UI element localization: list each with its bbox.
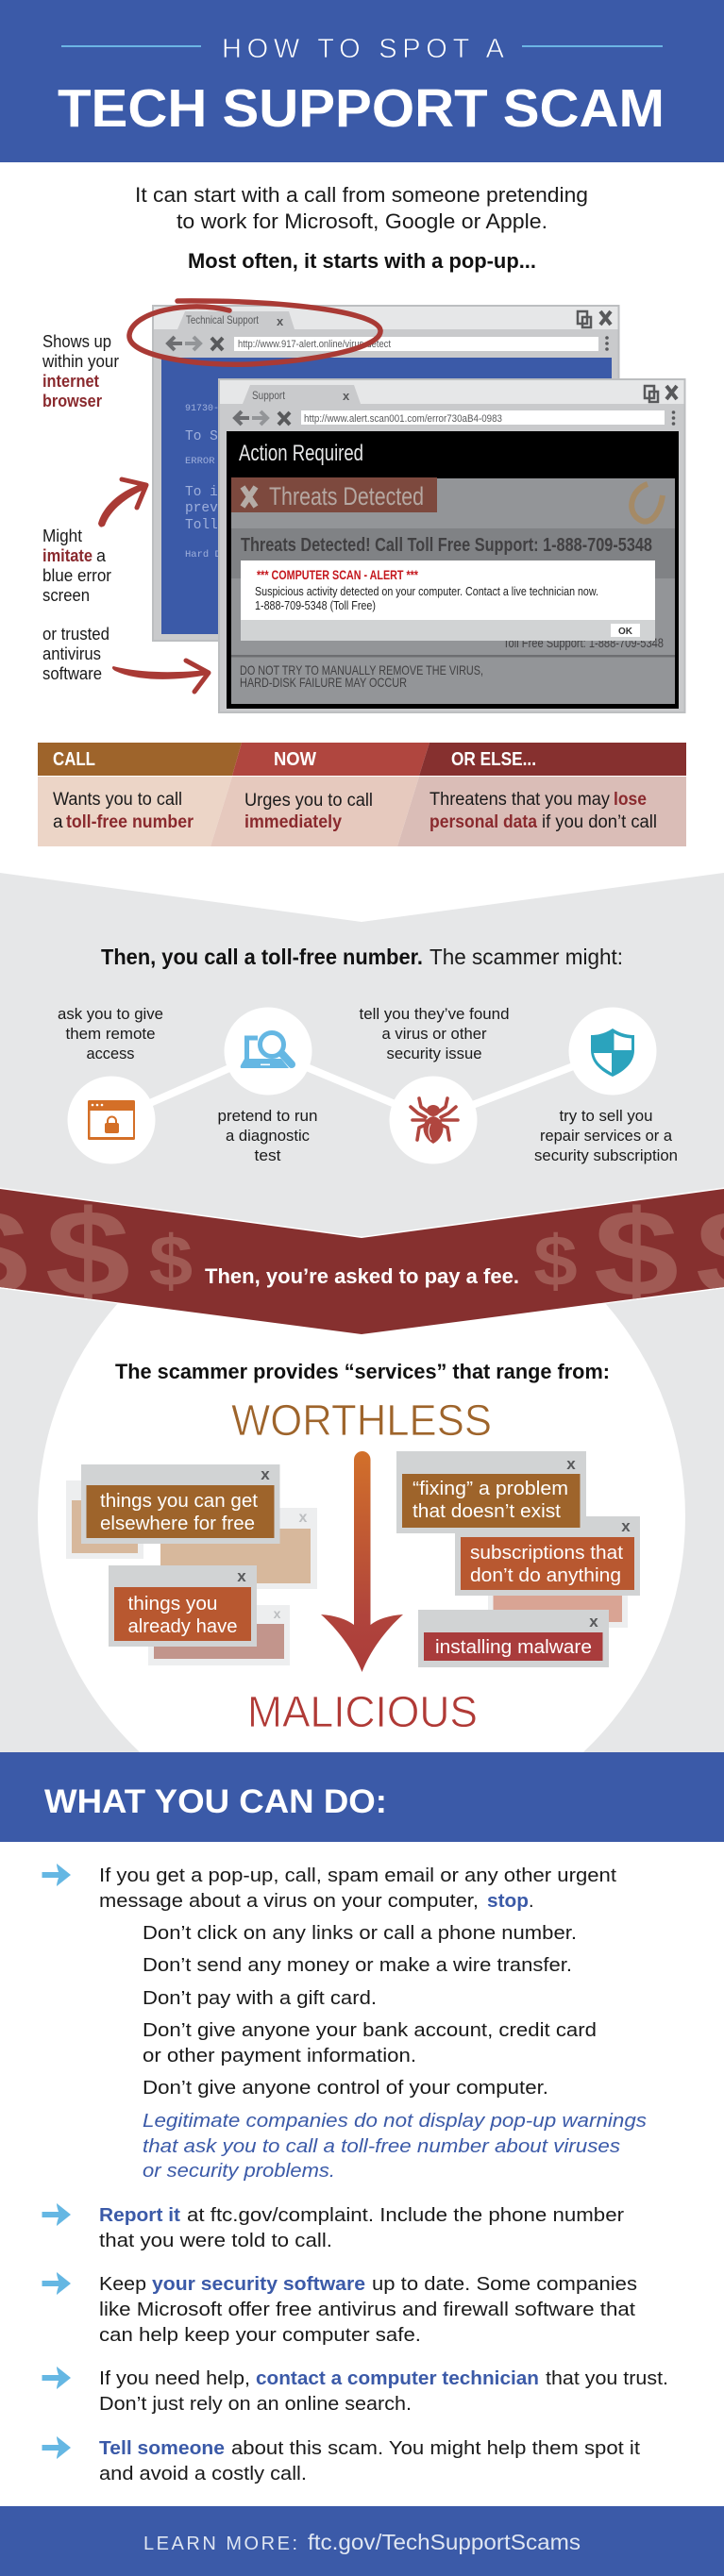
- back browser window: blue error screen: x: [277, 314, 284, 328]
- title kicker: HOW TO SPOT A: [222, 34, 505, 64]
- annotation: shows up in browser: browser: [42, 392, 102, 410]
- tip: contact a technician: contact a computer technician: [256, 2368, 539, 2389]
- front browser window: fake antivirus alert: Suspicious activity detected on your computer. Contact a live technician now.: [255, 585, 598, 598]
- annotation: shows up in browser: within your: [42, 352, 119, 371]
- annotation: trusted antivirus software: or trusted: [42, 625, 109, 644]
- italic note: Legitimate companies do not display pop-up warnings: [143, 2111, 647, 2132]
- front browser window: fake antivirus alert: Action Required: [239, 441, 363, 466]
- red chevron banner with dollar signs: $: [149, 1221, 193, 1301]
- arrow: to antivirus popup: [112, 661, 209, 692]
- tip: tell someone: Tell someone: [99, 2438, 225, 2459]
- grey section background: [0, 873, 724, 1752]
- sub-list of don'ts: Don’t give anyone your bank account, credit card: [143, 2020, 597, 2041]
- annotation: trusted antivirus software: [42, 625, 109, 683]
- annotation: imitate blue error screen: Might: [42, 527, 82, 545]
- italic note: or security problems.: [143, 2161, 335, 2182]
- popup: fixing a problem that doesn't exist: “fixing” a problem: [413, 1479, 568, 1499]
- tip: security software: like Microsoft offer free antivirus and firewall software that: [99, 2300, 635, 2320]
- column headings: CALL: [53, 749, 95, 770]
- label: diagnostic test: [217, 1107, 317, 1164]
- column text: [53, 790, 657, 832]
- column text: Wants you to call: [53, 790, 182, 810]
- tip: report it: Report it: [99, 2205, 180, 2226]
- front browser window: fake antivirus alert: [218, 378, 685, 713]
- icon: laptop with magnifier: [225, 1008, 311, 1095]
- footer banner: ftc.gov/TechSupportScams: [308, 2530, 581, 2554]
- tip: report it: [99, 2205, 624, 2251]
- label: sell repair services: try to sell you: [559, 1107, 653, 1125]
- label: remote access: access: [87, 1045, 134, 1062]
- label: found a virus: tell you they’ve found: [359, 1005, 510, 1023]
- column text: if you don’t call: [542, 812, 657, 832]
- annotation: trusted antivirus software: software: [42, 664, 102, 683]
- italic note: that ask you to call a toll-free number about viruses: [143, 2136, 620, 2157]
- arrow bullet 3: [42, 2272, 71, 2295]
- label: diagnostic test: a diagnostic: [226, 1127, 310, 1145]
- popup: installing malware: [418, 1610, 609, 1667]
- column text: immediately: [244, 812, 342, 832]
- tip: tell someone: about this scam. You might help them spot it: [231, 2438, 640, 2459]
- popup: installing malware: x: [589, 1613, 598, 1631]
- tip: report it: at ftc.gov/complaint. Include the phone number: [187, 2205, 624, 2226]
- gradient arrow worthless to malicious: [321, 1451, 403, 1672]
- column headings: OR ELSE...: [451, 749, 536, 770]
- annotation: shows up in browser: [42, 332, 119, 410]
- popup: subscriptions that don't do anything: x: [621, 1517, 631, 1535]
- header banner: [0, 0, 724, 162]
- popup: things you can get elsewhere for free: [81, 1464, 279, 1544]
- arrow bullet 2: [42, 2203, 71, 2226]
- tip: stop: .: [529, 1891, 534, 1912]
- popup: things you already have: things you: [128, 1594, 217, 1614]
- icon: spider bug: [389, 1076, 478, 1164]
- annotation: shows up in browser: Shows up: [42, 332, 111, 351]
- label: diagnostic test: pretend to run: [217, 1107, 317, 1125]
- intro text: Most often, it starts with a pop-up...: [188, 249, 536, 273]
- back browser window: blue error screen: 91730-: [185, 404, 219, 414]
- italic note: [143, 2111, 647, 2182]
- back browser window: blue error screen: To i: [185, 485, 218, 500]
- what you can do banner: WHAT YOU CAN DO:: [44, 1783, 387, 1820]
- popup: fixing a problem that doesn't exist: [396, 1451, 586, 1533]
- tip: stop: If you get a pop-up, call, spam email or any other urgent: [99, 1865, 616, 1886]
- heading: then you call: Then, you call a toll-free number.: [101, 945, 423, 969]
- front browser window: fake antivirus alert: HARD-DISK FAILURE MAY OCCUR: [240, 675, 407, 690]
- tip: contact a technician: Don’t just rely on an online search.: [99, 2394, 412, 2415]
- popup: things you can get elsewhere for free: x: [261, 1465, 270, 1483]
- tip: security software: your security software: [152, 2274, 365, 2295]
- arrow: to blue error screen: [98, 479, 146, 527]
- back browser window: blue error screen: To S: [185, 429, 218, 444]
- back browser window: blue error screen: Hard D: [185, 549, 221, 560]
- label: found a virus: security issue: [387, 1045, 481, 1062]
- what you can do banner: [0, 1752, 724, 1842]
- back browser window: blue error screen: Technical Support: [186, 313, 260, 326]
- popup: fixing a problem that doesn't exist: that doesn’t exist: [413, 1501, 561, 1522]
- label: found a virus: a virus or other: [381, 1025, 487, 1043]
- column text: toll-free number: [66, 812, 194, 832]
- popup: things you already have: x: [237, 1567, 246, 1585]
- front browser window: fake antivirus alert: *** COMPUTER SCAN - ALERT ***: [257, 568, 419, 582]
- ghost popup windows: x: [299, 1510, 308, 1526]
- popup: things you already have: [109, 1565, 257, 1647]
- front browser window: fake antivirus alert: x: [343, 389, 350, 403]
- icon: browser lock: [68, 1076, 155, 1164]
- tip: security software: Keep: [99, 2274, 146, 2295]
- banner text: Then, you’re asked to pay a fee.: [205, 1264, 519, 1288]
- red chevron banner with dollar signs: $: [594, 1185, 679, 1322]
- label: remote access: [58, 1005, 163, 1062]
- sub-list of don'ts: Don’t pay with a gift card.: [143, 1988, 377, 2009]
- back browser window: blue error screen: prev: [185, 501, 218, 516]
- annotation: shows up in browser: internet: [42, 372, 99, 391]
- label: remote access: them remote: [66, 1025, 155, 1043]
- title: TECH SUPPORT SCAM: [58, 78, 665, 139]
- tip: report it: that you were told to call.: [99, 2231, 332, 2251]
- red chevron banner with dollar signs: [0, 1185, 724, 1335]
- icon: security shield: [568, 1008, 657, 1095]
- tip: tell someone: [99, 2438, 640, 2484]
- front browser window: fake antivirus alert: OK: [618, 627, 633, 637]
- red chevron banner with dollar signs: $: [45, 1185, 130, 1322]
- column text: Threatens that you may: [429, 790, 610, 810]
- heading: then you call: The scammer might:: [429, 945, 623, 969]
- tip: contact a technician: [99, 2368, 668, 2415]
- arrow bullet 1: [42, 1864, 71, 1886]
- back browser window: blue error screen: ERROR: [185, 456, 215, 467]
- intro text: It can start with a call from someone pretending: [135, 183, 588, 207]
- front browser window: fake antivirus alert: http://www.alert.scan001.com/error730aB4-0983: [304, 413, 502, 425]
- arrow bullet 5: [42, 2436, 71, 2459]
- sub-list of don'ts: Don’t give anyone control of your computer.: [143, 2078, 548, 2099]
- intro text: to work for Microsoft, Google or Apple.: [177, 209, 547, 233]
- sub-list of don'ts: Don’t click on any links or call a phone number.: [143, 1923, 577, 1944]
- sub-list of don'ts: Don’t send any money or make a wire transfer.: [143, 1955, 572, 1976]
- sub-list of don'ts: or other payment information.: [143, 2046, 416, 2066]
- tip: security software: can help keep your computer safe.: [99, 2325, 421, 2346]
- label: found a virus: [359, 1005, 510, 1062]
- white circle background: [38, 1304, 685, 1752]
- front browser window: fake antivirus alert: Threats Detected: [269, 482, 424, 510]
- front browser window: fake antivirus alert: Toll Free Support: 1-888-709-5348: [503, 635, 664, 650]
- label: diagnostic test: test: [255, 1146, 281, 1164]
- connector path between icons: [111, 1051, 613, 1120]
- column headings: [53, 749, 536, 770]
- tip: contact a technician: that you trust.: [546, 2368, 668, 2389]
- popup: things you can get elsewhere for free: elsewhere for free: [100, 1514, 255, 1534]
- popup: subscriptions that don't do anything: don’t do anything: [470, 1565, 621, 1586]
- tip: contact a technician: If you need help,: [99, 2368, 250, 2389]
- red chevron banner with dollar signs: $: [533, 1221, 578, 1301]
- annotation: imitate blue error screen: [42, 527, 111, 605]
- footer banner: LEARN MORE:: [143, 2534, 297, 2554]
- front browser window: fake antivirus alert: Support: [252, 389, 286, 402]
- tip: stop: stop: [487, 1891, 529, 1912]
- popup: things you already have: already have: [128, 1616, 238, 1637]
- ghost popup windows: x: [274, 1606, 281, 1621]
- annotation: imitate blue error screen: blue error: [42, 566, 111, 585]
- red hand-drawn circle around browser address bar: [129, 301, 380, 364]
- back browser window: blue error screen: http://www.917-alert.online/virus-detect: [238, 339, 391, 350]
- column text: Urges you to call: [244, 791, 373, 811]
- label: worthless: WORTHLESS: [231, 1396, 492, 1445]
- column text: a: [53, 812, 63, 832]
- column text: lose: [614, 790, 647, 810]
- tip: security software: up to date. Some companies: [372, 2274, 637, 2295]
- front browser window: fake antivirus alert: DO NOT TRY TO MANUALLY REMOVE THE VIRUS,: [240, 662, 483, 677]
- popup: subscriptions that don't do anything: subscriptions that: [470, 1543, 623, 1564]
- popup: things you can get elsewhere for free: things you can get: [100, 1491, 258, 1512]
- tip: tell someone: and avoid a costly call.: [99, 2464, 307, 2484]
- popup: subscriptions that don't do anything: [455, 1516, 640, 1596]
- heading: services range: The scammer provides “services” that range from:: [115, 1360, 610, 1383]
- annotation: imitate blue error screen: screen: [42, 586, 90, 605]
- label: remote access: ask you to give: [58, 1005, 163, 1023]
- back browser window: blue error screen: Toll: [185, 518, 218, 533]
- popup: installing malware: installing malware: [435, 1637, 592, 1658]
- label: malicious: MALICIOUS: [247, 1687, 478, 1736]
- sub-list of don'ts: [143, 1923, 597, 2099]
- tip: security software: [99, 2274, 637, 2346]
- heading: then you call: [101, 945, 623, 969]
- arrow bullet 4: [42, 2367, 71, 2389]
- annotation: imitate blue error screen: a: [96, 546, 107, 565]
- popup: fixing a problem that doesn't exist: x: [566, 1455, 576, 1473]
- front browser window: fake antivirus alert: 1-888-709-5348 (Toll Free): [255, 599, 376, 612]
- column headings: NOW: [274, 749, 316, 770]
- footer banner: [0, 2506, 724, 2576]
- annotation: trusted antivirus software: antivirus: [42, 644, 101, 663]
- ghost popup windows: [66, 1480, 628, 1665]
- tip: stop: [99, 1865, 647, 2182]
- back browser window: blue error screen: [152, 305, 619, 642]
- label: sell repair services: repair services or a: [540, 1127, 673, 1145]
- annotation: imitate blue error screen: imitate: [42, 546, 93, 565]
- label: sell repair services: [534, 1107, 678, 1164]
- label: sell repair services: security subscription: [534, 1146, 678, 1164]
- call now or else table: [38, 743, 686, 846]
- tip: stop: message about a virus on your computer,: [99, 1891, 479, 1912]
- intro text: [135, 183, 588, 273]
- column text: personal data: [429, 812, 537, 832]
